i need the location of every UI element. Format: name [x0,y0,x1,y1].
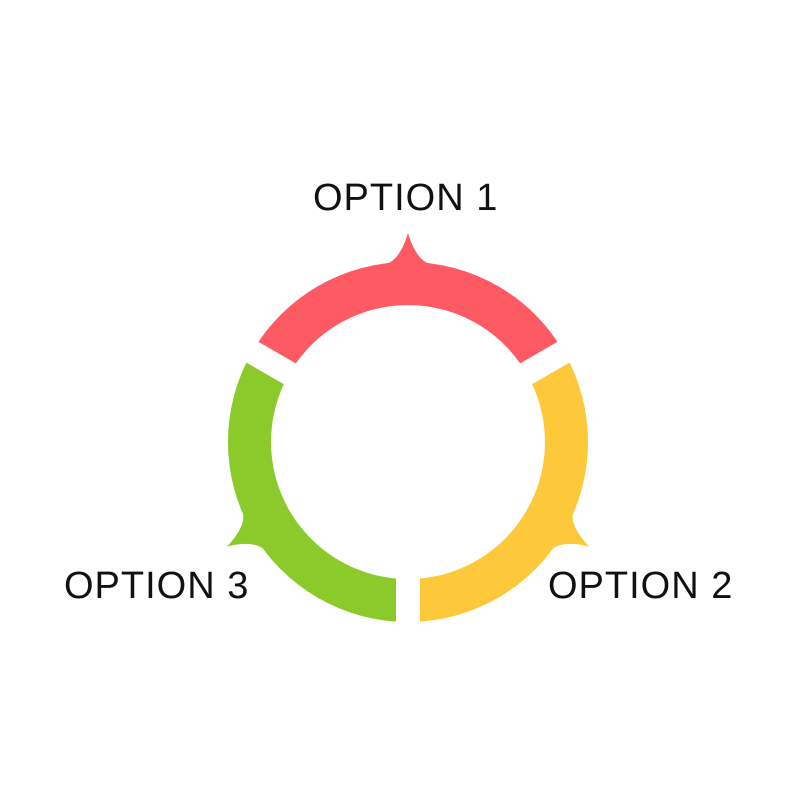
title: option 1: OPTION 1 [313,177,498,219]
label: option 2: OPTION 2 [548,565,733,607]
segment: green (option 3) [216,352,408,622]
label: option 3: OPTION 3 [64,565,249,607]
segment: yellow (option 2) [408,352,600,622]
segment: red (option 1) [252,233,564,374]
